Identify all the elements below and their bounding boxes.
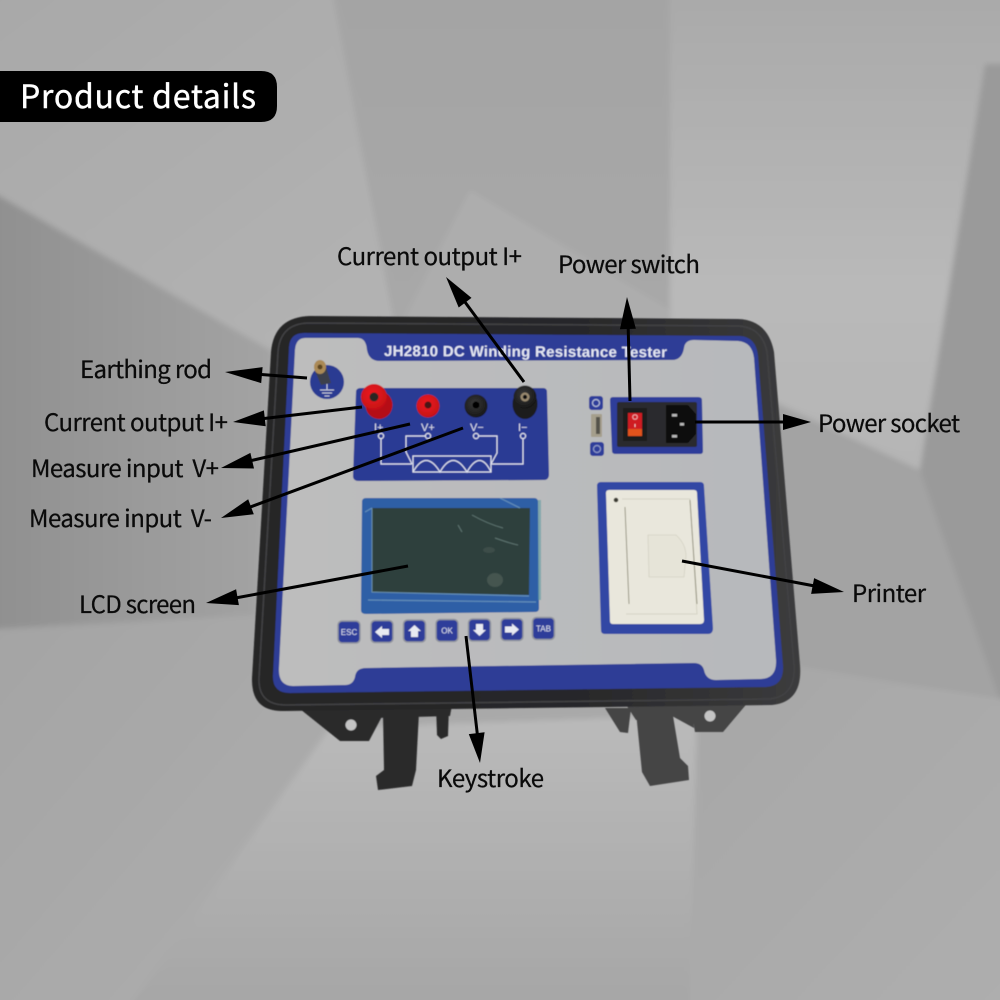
arrow: LCD screen bbox=[206, 566, 408, 605]
keypad bbox=[338, 618, 554, 643]
label: Earthing rod: Earthing rod bbox=[80, 350, 212, 385]
arrow: measure input V- bbox=[221, 428, 463, 518]
circuit diagram bbox=[378, 433, 526, 472]
earthing rod bbox=[310, 360, 344, 399]
keypad: OK bbox=[441, 626, 453, 636]
arrow: current output I+ (top) bbox=[446, 277, 524, 382]
terminal panel bbox=[353, 384, 549, 481]
label: Measure input V-: Measure input V- bbox=[29, 499, 212, 534]
arrow: power switch bbox=[620, 297, 636, 401]
terminal labels bbox=[374, 422, 527, 434]
rocker switch bbox=[623, 408, 647, 441]
terminal labels: I+ bbox=[374, 422, 383, 434]
device title: JH2810 DC Winding Resistance Tester bbox=[384, 343, 667, 361]
label: Keystroke: Keystroke bbox=[437, 759, 544, 794]
label: Power switch: Power switch bbox=[558, 245, 700, 280]
keypad: ESC bbox=[341, 628, 357, 637]
keypad: TAB bbox=[536, 624, 551, 634]
black terminal I- bbox=[512, 386, 538, 419]
IEC socket bbox=[666, 405, 696, 443]
terminal labels: V+ bbox=[421, 422, 435, 434]
label: LCD screen: LCD screen bbox=[79, 585, 196, 620]
LCD screen bbox=[361, 498, 541, 614]
terminal labels: I− bbox=[518, 422, 527, 434]
label: Current output I+ (left): Current output I+ bbox=[44, 403, 228, 438]
arrow: earthing rod bbox=[225, 367, 307, 383]
arrow: keystroke bbox=[466, 636, 485, 763]
black terminal V- bbox=[464, 394, 488, 418]
ear holes bbox=[346, 710, 716, 730]
outer black case bbox=[252, 316, 800, 711]
bottom ears and latches bbox=[295, 705, 452, 790]
arrow: current output I+ (left) bbox=[233, 407, 362, 426]
arrow: power socket bbox=[695, 414, 811, 430]
power module bbox=[610, 397, 703, 454]
red terminal I+ bbox=[361, 384, 392, 419]
terminal labels: V− bbox=[470, 422, 484, 434]
blue bezel bbox=[273, 333, 783, 693]
label: Current output I+ (top): Current output I+ bbox=[337, 237, 522, 272]
label: Power socket: Power socket bbox=[818, 404, 960, 439]
arrow: printer bbox=[682, 561, 844, 594]
printer bbox=[597, 482, 713, 634]
label: Printer: Printer bbox=[852, 574, 927, 609]
arrow: measure input V+ bbox=[221, 424, 410, 468]
label: Measure input V+: Measure input V+ bbox=[31, 449, 219, 484]
red terminal V+ bbox=[416, 394, 440, 418]
heading: Product details: Product details bbox=[20, 72, 256, 118]
grey front panel bbox=[279, 338, 776, 686]
device: DC winding resistance tester bbox=[252, 316, 800, 790]
USB port and icons bbox=[589, 396, 604, 456]
